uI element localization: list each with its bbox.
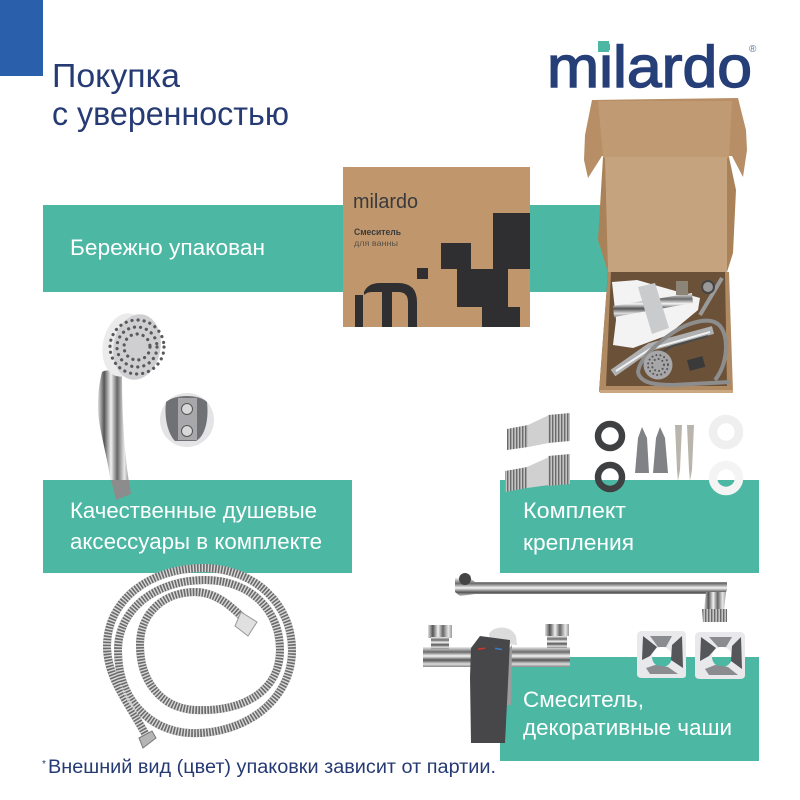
hose end fitting top — [235, 612, 257, 636]
holder in box — [687, 356, 705, 371]
white wrap — [612, 280, 700, 348]
band: Качественные душевые аксессуары: Качественные душевые — [70, 498, 317, 523]
spray holes — [110, 320, 164, 374]
band: Комплект крепления: Комплект — [523, 498, 626, 523]
white washers — [713, 419, 739, 445]
band: Смеситель, декоративные чаши — [500, 657, 759, 761]
black rings — [598, 424, 622, 448]
band: Качественные душевые аксессуары: аксессуары в комплекте — [70, 529, 322, 554]
hose in box — [638, 321, 730, 385]
decorative escutcheons — [637, 631, 745, 679]
wall plugs — [635, 427, 649, 473]
corner accent block — [0, 0, 43, 76]
band: Бережно упакован — [43, 205, 618, 292]
box label: Смеситель — [354, 227, 401, 237]
title: Покупка — [52, 57, 181, 94]
lever chrome — [506, 645, 512, 705]
head body — [97, 309, 151, 381]
mixer in box — [613, 293, 693, 317]
shower head in box — [644, 350, 672, 380]
box interior — [599, 272, 732, 392]
closed kraft box — [343, 167, 530, 327]
wall holder — [160, 393, 214, 447]
footnote: * — [42, 759, 46, 770]
open kraft box with contents — [584, 98, 747, 393]
footnote: Внешний вид (цвет) упаковки зависит от партии. — [48, 757, 496, 778]
band: Качественные душевые аксессуары — [43, 480, 352, 573]
eccentric adapters — [505, 413, 570, 492]
band: Смеситель, декоративные чаши: Смеситель, — [523, 687, 644, 712]
screws — [675, 425, 682, 481]
box large m — [355, 283, 417, 327]
brand logo: milardo: milardo — [547, 35, 752, 100]
box label — [354, 227, 401, 248]
box block pattern — [441, 213, 530, 327]
box label: для ванны — [354, 238, 398, 248]
band: Комплект крепления: крепления — [523, 530, 634, 555]
hose end fitting bottom — [139, 731, 156, 748]
band: Бережно упакован: Бережно упакован — [70, 235, 265, 260]
black lever — [470, 636, 510, 743]
mounting kit parts — [505, 413, 739, 492]
brand logo: milardo: ® — [749, 44, 757, 55]
back wall — [603, 157, 729, 272]
box logo: milardo — [353, 191, 418, 213]
lever cap — [489, 628, 517, 645]
band: Смеситель, декоративные чаши: декоративные чаши — [523, 715, 732, 740]
shower hand head — [97, 309, 166, 491]
flexible shower hose — [107, 568, 292, 748]
bath spout — [455, 573, 727, 622]
title: с уверенностью — [52, 95, 289, 132]
bath mixer body — [423, 624, 570, 743]
spout in box — [613, 330, 713, 373]
title — [52, 57, 289, 132]
band: Комплект крепления — [500, 480, 759, 573]
handle — [98, 370, 129, 491]
lid — [584, 98, 747, 178]
